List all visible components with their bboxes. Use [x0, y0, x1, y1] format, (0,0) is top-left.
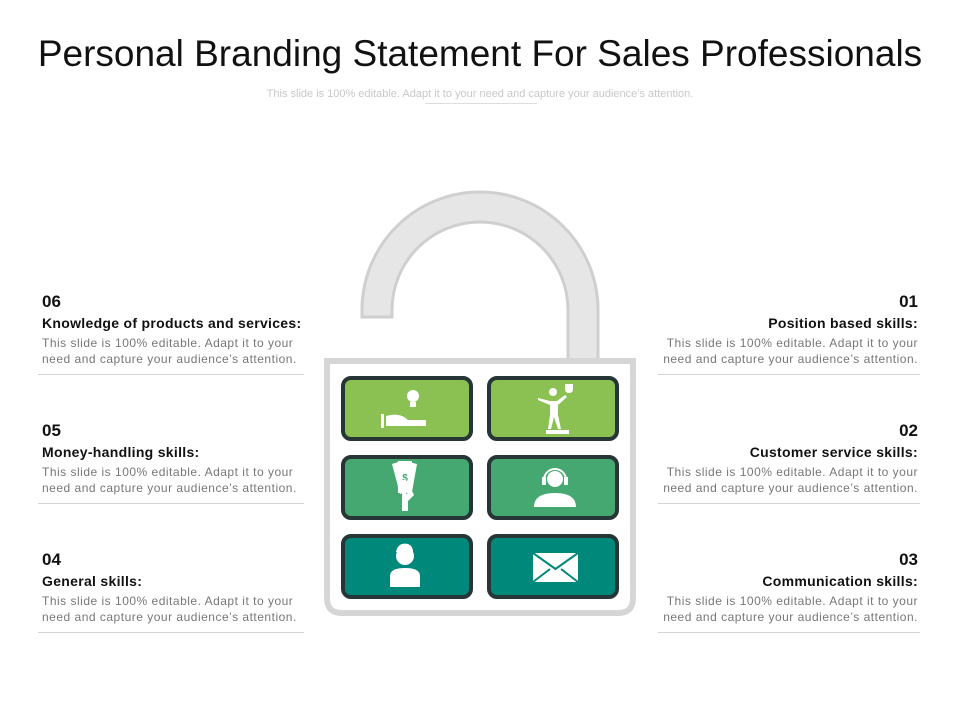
item 02: 02	[899, 421, 918, 440]
item 06: Knowledge of products and services:	[42, 315, 301, 331]
item 02: This slide is 100% editable. Adapt it to your	[667, 465, 918, 479]
item 06: This slide is 100% editable. Adapt it to your	[42, 336, 293, 350]
item 01	[658, 292, 920, 375]
box: ideas (06)	[343, 378, 471, 439]
item 03	[658, 550, 920, 633]
item 02: Customer service skills:	[750, 444, 918, 460]
shackle	[362, 192, 598, 362]
item 02: need and capture your audience’s attention.	[663, 481, 918, 495]
item 04: 04	[42, 550, 61, 569]
item 02	[658, 421, 920, 504]
box: money (05): $	[402, 473, 408, 484]
item 04: This slide is 100% editable. Adapt it to your	[42, 594, 293, 608]
item 05: This slide is 100% editable. Adapt it to your	[42, 465, 293, 479]
item 01: need and capture your audience’s attention.	[663, 352, 918, 366]
item 03: This slide is 100% editable. Adapt it to your	[667, 594, 918, 608]
item 01: 01	[899, 292, 918, 311]
item 05: 05	[42, 421, 61, 440]
item 06	[38, 292, 304, 375]
box: general person (04)	[343, 536, 471, 597]
item 05	[38, 421, 304, 504]
item 03: Communication skills:	[762, 573, 918, 589]
item 04: General skills:	[42, 573, 142, 589]
item 03: 03	[899, 550, 918, 569]
subtitle: This slide is 100% editable. Adapt it to your need and capture your audience’s attention.	[267, 88, 693, 100]
item 03: need and capture your audience’s attention.	[663, 610, 918, 624]
title: Personal Branding Statement For Sales Professionals	[38, 33, 922, 74]
box: money (05)	[343, 457, 471, 518]
item 01: Position based skills:	[768, 315, 918, 331]
box: customer service (02)	[489, 457, 617, 518]
item 04	[38, 550, 304, 633]
item 01: This slide is 100% editable. Adapt it to your	[667, 336, 918, 350]
box: position / trophy (01)	[489, 378, 617, 439]
item 06: need and capture your audience’s attention.	[42, 352, 297, 366]
lock body	[327, 361, 633, 613]
item 05: need and capture your audience’s attention.	[42, 481, 297, 495]
item 06: 06	[42, 292, 61, 311]
item 05: Money-handling skills:	[42, 444, 200, 460]
item 04: need and capture your audience’s attention.	[42, 610, 297, 624]
box: email (03)	[489, 536, 617, 597]
